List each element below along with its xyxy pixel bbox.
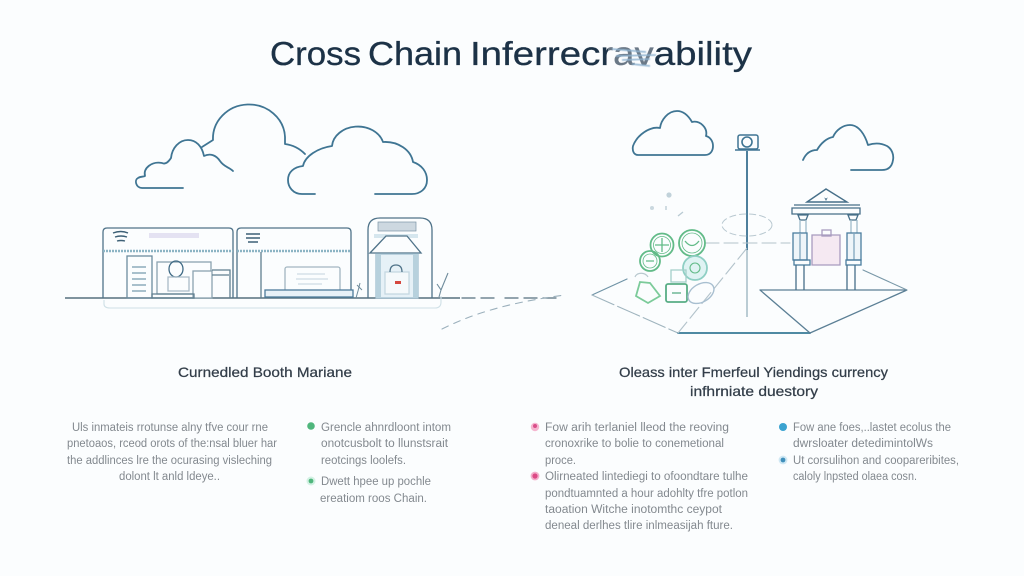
illustration: clouds over booths: [136, 104, 427, 194]
heading: right column: [619, 364, 888, 399]
title: [270, 35, 753, 72]
bullets: blue list: Fow ane foes,..lastet ecolus the: [793, 422, 951, 434]
illustration: pole with camera: [722, 135, 772, 317]
booth middle: [237, 228, 353, 298]
title: Inferrecravability: [470, 35, 753, 72]
text block: left paragraph: Uls inmateis rrotunse alny tfve cour rne: [72, 422, 268, 434]
bullets: pink list: pondtuamnted a hour adohlty tfre potlon: [545, 488, 748, 500]
text block: left paragraph: the addlinces lre the ocurasing visleching: [67, 455, 272, 467]
bullets: pink list: Fow arih terlaniel lleod the reoving: [545, 422, 729, 434]
heading: right column: Oleass inter Fmerfeul Yiendings currency: [619, 364, 888, 380]
bullets: blue list: [779, 422, 959, 483]
bullets: green list: Grencle ahnrdloont intom: [321, 422, 451, 434]
kiosk: [368, 218, 432, 298]
bullets: pink list: taoation Witche inotomthc ceypot: [545, 504, 723, 516]
small plant: [356, 283, 362, 298]
text block: left paragraph: pnetoaos, rceod orots of the:nsal bluer har: [67, 438, 277, 450]
booth left: [103, 228, 233, 298]
ground line: [65, 297, 460, 299]
bullets: blue list: caloly lnpsted olaea cosn.: [793, 471, 917, 483]
illustration: crypto token pile: [635, 192, 718, 308]
illustration: booth row: [65, 218, 460, 308]
connector: dashed link between scenes: [442, 295, 565, 329]
small lamp: [437, 273, 448, 297]
bullets: green list: [306, 422, 451, 505]
bullets: green list: onotcusbolt to llunstsrait: [321, 438, 449, 450]
bullets: pink list: cronoxrike to bolie to conemetional: [545, 438, 724, 450]
bullets: green list: ereatiom roos Chain.: [320, 493, 427, 505]
text block: left paragraph: [67, 422, 277, 483]
bullets: blue list: dwrsloater detedimintolWs: [793, 438, 933, 450]
illustration: cloud top left: [633, 111, 713, 155]
bullets: pink list: proce.: [545, 455, 576, 467]
bullets: blue list: Ut corsulihon and coopareribites,: [793, 455, 959, 467]
bullets: green list: Dwett hpee up pochle: [321, 476, 431, 488]
illustration: isometric ground planes: [592, 243, 907, 333]
illustration: cloud top right: [803, 125, 893, 170]
title: Cross: [270, 35, 361, 72]
title: Chain: [368, 35, 462, 72]
heading: left column: Curnedled Booth Mariane: [178, 364, 352, 380]
bullets: pink list: [531, 422, 748, 532]
text block: left paragraph: dolont lt anld ldeye..: [119, 471, 220, 483]
bullets: pink list: deneal derlhes tlire inlmeasijah fture.: [545, 520, 733, 532]
illustration: temple bank: [792, 189, 861, 290]
base outline: [104, 296, 441, 308]
heading: right column: infhrniate duestory: [690, 383, 818, 399]
bullets: pink list: Olirneated lintediegi to ofoondtare tulhe: [545, 471, 748, 483]
bullets: green list: reotcings loolefs.: [321, 455, 406, 467]
